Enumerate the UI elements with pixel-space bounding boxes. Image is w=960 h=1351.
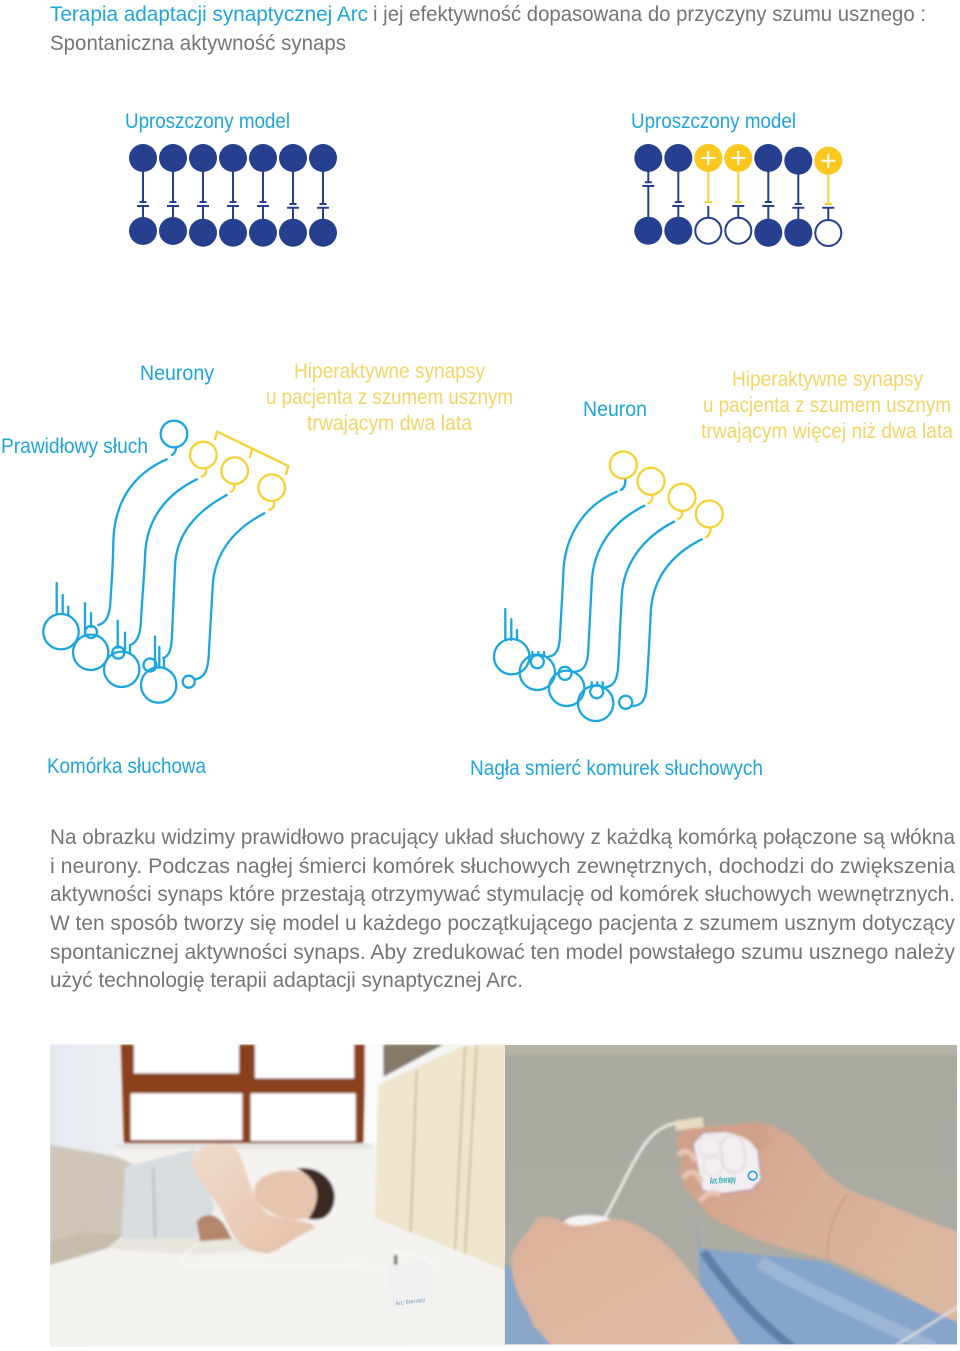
title: Spontaniczna aktywność synaps [50, 32, 346, 55]
label: neuron: Neuron [583, 398, 647, 421]
nerve fibres [548, 492, 702, 706]
diagram: sudden hair cell death [494, 452, 723, 721]
photo: woman sleeping on bed with device: Arc therapy [395, 1297, 426, 1308]
diagram: healthy synapses [129, 144, 337, 247]
text block: description: W ten sposób tworzy się model u każdego początkującego pacjenta z szumem usznym dotyczący [50, 912, 955, 935]
label: neurons: Neurony [140, 362, 214, 385]
hair cells [43, 583, 195, 703]
label: normal hearing: Prawidłowy słuch [1, 435, 148, 458]
bracket [215, 432, 288, 474]
label: hyperactive synapses over two years [701, 368, 953, 443]
text block: description: użyć technologię terapii adaptacji synaptycznej Arc. [50, 969, 523, 992]
label: hair cell: Komórka słuchowa [47, 755, 206, 778]
diagram: normal hearing neurons and hair cells [43, 421, 288, 703]
text block: description: i neurony. Podczas nagłej śmierci komórek słuchowych zewnętrznych, dochodzi do zwiększenia [50, 855, 955, 878]
label: hyperactive synapses two years: trwającym dwa lata [307, 412, 472, 435]
photo: hands holding device [502, 1042, 960, 1348]
photo: hands holding device: Arc therapy [709, 1174, 736, 1186]
neuron cell bodies [161, 421, 285, 510]
title [50, 3, 926, 55]
nerve fibres [98, 459, 264, 679]
photo: woman sleeping on bed with device [50, 1042, 512, 1348]
heading: simplified model left: Uproszczony model [125, 110, 290, 133]
title: i jej efektywność dopasowana do przyczyny szumu usznego : [373, 3, 926, 26]
label: hyperactive synapses two years: u pacjenta z szumem usznym [266, 386, 513, 409]
text block: description: aktywności synaps które przestają otrzymywać stymulację od komórek słuchowych wewnętrznych. [50, 883, 955, 906]
text block: description [50, 826, 955, 992]
label: hyperactive synapses over two years: Hiperaktywne synapsy [732, 368, 923, 391]
neuron cell bodies [610, 452, 723, 537]
text block: description: Na obrazku widzimy prawidłowo pracujący układ słuchowy z każdką komórką połączone są włókna [50, 826, 955, 849]
label: hyperactive synapses two years: Hiperaktywne synapsy [294, 360, 485, 383]
label: sudden death of hair cells: Nagła smierć komurek słuchowych [470, 757, 763, 780]
heading: simplified model right: Uproszczony model [631, 110, 796, 133]
title: Terapia adaptacji synaptycznej Arc [50, 3, 368, 26]
diagram: synapses with hyperactivity [634, 144, 842, 247]
label: hyperactive synapses two years [266, 360, 513, 435]
hair cells [494, 609, 632, 721]
text block: description: spontanicznej aktywności synaps. Aby zredukować ten model powstałego szumu usznego należy [50, 941, 955, 964]
